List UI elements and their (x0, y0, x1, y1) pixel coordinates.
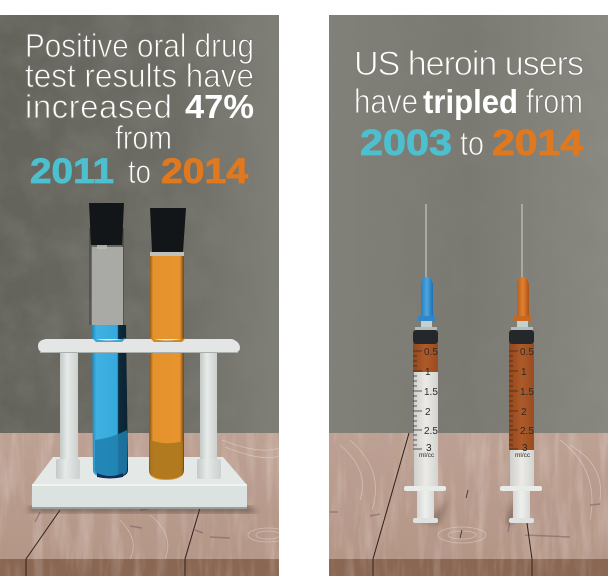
scale markings: 3 (522, 443, 528, 454)
scale markings (509, 347, 534, 459)
wall background (0, 15, 279, 433)
panel: oral drug test (0, 15, 288, 576)
scale markings: 2.5 (520, 426, 534, 437)
heading: heroin users tripled: to (460, 125, 484, 163)
heading: heroin users tripled (354, 45, 584, 163)
scale markings: 2 (521, 407, 527, 418)
scale markings: 0.5 (424, 347, 438, 358)
scale markings: ml/cc (419, 452, 435, 459)
heading: positive oral drug test results: from (115, 119, 172, 156)
test tube rack base (28, 457, 258, 513)
scale markings (413, 347, 438, 459)
heading: positive oral drug test results: test results have (25, 57, 254, 94)
scale markings: ml/cc (515, 452, 531, 459)
blue test tube (89, 203, 128, 478)
wooden table (0, 433, 288, 576)
scale markings: 1 (521, 367, 527, 378)
scale markings: 2.5 (424, 426, 438, 437)
heading: positive oral drug test results: 2014 (161, 152, 249, 191)
scale markings: 2 (425, 407, 431, 418)
heading: heroin users tripled: 2014 (492, 122, 583, 163)
panel: heroin users (329, 15, 608, 576)
syringe: fully filled, orange hub (500, 204, 542, 525)
heading: positive oral drug test results: 2011 (30, 152, 114, 191)
scale markings: 3 (426, 443, 432, 454)
scale markings: 1.5 (520, 387, 534, 398)
heading: positive oral drug test results: Positive oral drug (25, 27, 254, 64)
heading: heroin users tripled: 2003 (360, 122, 452, 163)
syringe: one third filled, blue hub (404, 204, 452, 525)
wooden table (329, 433, 608, 576)
scale markings: 0.5 (520, 347, 534, 358)
heading: positive oral drug test results (25, 27, 254, 191)
heading: positive oral drug test results: increased (25, 88, 172, 125)
rack posts (56, 353, 221, 479)
heading: heroin users tripled: from (526, 83, 583, 121)
rack top plate (38, 338, 240, 353)
scale markings: 1 (425, 367, 431, 378)
heading: positive oral drug test results: 47% (185, 88, 254, 125)
heading: heroin users tripled: US heroin users (354, 45, 584, 83)
orange test tube (149, 208, 186, 480)
scale markings: 1.5 (424, 387, 438, 398)
heading: heroin users tripled: have (354, 83, 418, 121)
heading: heroin users tripled: tripled (423, 83, 518, 120)
wall background (329, 15, 608, 433)
heading: positive oral drug test results: to (128, 153, 151, 190)
